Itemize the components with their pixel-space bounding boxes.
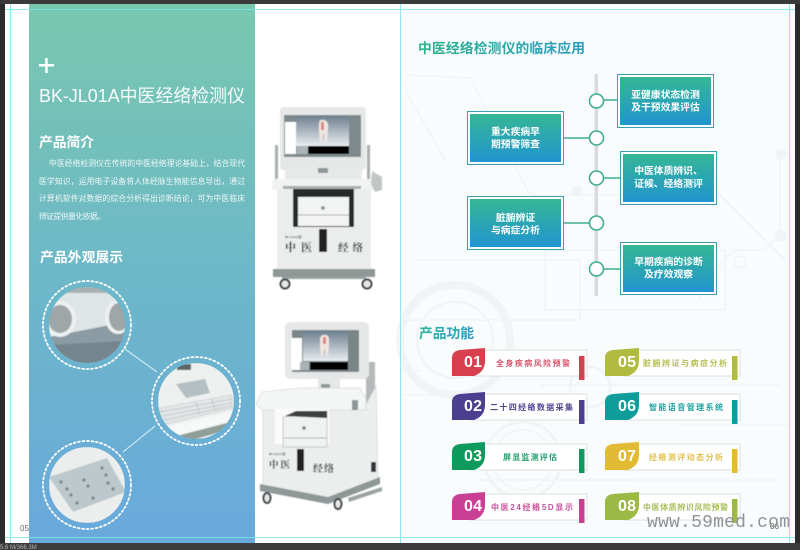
function 03 xyxy=(452,442,587,473)
application box 5: 早期疾病的诊断 xyxy=(634,255,703,268)
left gradient panel xyxy=(29,4,255,543)
application box 5 xyxy=(620,242,716,294)
heading: product intro: 产品简介 xyxy=(39,134,94,150)
application box 3 xyxy=(620,152,716,204)
timeline node 5 xyxy=(590,262,620,276)
connector lines between detail circles xyxy=(123,349,157,452)
function 04 xyxy=(452,492,587,523)
function 07 xyxy=(605,442,740,473)
function 02: 二十四经络数据采集 xyxy=(490,402,573,412)
function 08 xyxy=(605,492,740,523)
application box 4: 脏腑辨证 xyxy=(496,211,535,224)
heading: product functions: 产品功能 xyxy=(419,325,474,341)
function 01: 全身疾病风险预警 xyxy=(496,358,570,368)
text block: product intro: 计算机软件对数据的综合分析得出诊断结论，可为中医临床 xyxy=(39,193,245,203)
page: right tinted sheet xyxy=(400,4,795,543)
function 04: 中医24经络5D显示 xyxy=(491,502,573,512)
application box 5: 及疗效观察 xyxy=(644,268,693,280)
application box 4 xyxy=(468,196,564,250)
product photo: machine angled view: 经络 xyxy=(313,460,335,475)
product photo: machine front view xyxy=(272,107,382,288)
heading: clinical application: 中医经络检测仪的临床应用 xyxy=(418,40,585,56)
timeline node 1 xyxy=(590,94,617,108)
application box 3: 证候、经络测评 xyxy=(634,177,703,190)
function 01: 01 xyxy=(464,354,482,371)
product photo: machine front view: 中医 xyxy=(285,239,317,255)
function 04: 04 xyxy=(464,498,482,515)
product photo: machine angled view: BK-JL01A型 xyxy=(269,451,286,456)
text block: product intro: 医学知识，运用电子设备将人体经脉生物能信息导出，通过 xyxy=(39,176,245,186)
function 06: 06 xyxy=(618,398,636,415)
function 07: 经络测评动态分析 xyxy=(649,452,723,462)
application box 1 xyxy=(618,74,714,128)
function 05 xyxy=(605,348,740,380)
product photo: machine front view: 经络 xyxy=(338,240,367,255)
detail circle: keyboard xyxy=(152,357,240,445)
heading: product appearance: 产品外观展示 xyxy=(40,249,123,265)
text block: product intro: 辨证提供量化依据。 xyxy=(39,211,105,221)
function 06 xyxy=(605,392,740,424)
function 07: 07 xyxy=(618,448,636,465)
application box 2: 期预警筛查 xyxy=(491,138,540,150)
page number right: 06 xyxy=(770,522,779,531)
timeline node 2 xyxy=(564,131,604,145)
function 02: 02 xyxy=(464,398,482,415)
application box 1: 亚健康状态检测 xyxy=(631,88,700,101)
timeline: vertical bar xyxy=(594,74,598,296)
timeline node 3 xyxy=(590,171,620,185)
application box 2: 重大疾病早 xyxy=(491,125,540,138)
function 01 xyxy=(452,348,587,380)
detail circle: speakers xyxy=(43,281,131,369)
faint circuit background pattern xyxy=(400,75,790,498)
page: left white sheet xyxy=(5,4,400,543)
application box 1: 及干预效果评估 xyxy=(631,100,700,114)
function 05: 脏腑辨证与病症分析 xyxy=(643,358,727,368)
page number left: 05 xyxy=(20,524,29,533)
function 08: 08 xyxy=(618,498,636,515)
product photo: machine front view: BK-JL01A型 xyxy=(285,234,302,239)
function 02 xyxy=(452,392,587,424)
title: BK-JL01A中医经络检测仪 xyxy=(39,86,245,106)
product photo: machine angled view: 中医 xyxy=(269,457,292,471)
text block: product intro: 中医经络检测仪在传统的中医经络理论基础上，结合现代 xyxy=(49,158,245,168)
application box 2 xyxy=(468,112,564,164)
timeline node 4 xyxy=(564,216,604,230)
function 03: 屏显监测评估 xyxy=(503,452,557,462)
function 03: 03 xyxy=(464,448,482,465)
icon: plus sign xyxy=(39,58,54,73)
application box 3: 中医体质辨识、 xyxy=(634,164,703,177)
detail circle: control panel xyxy=(43,441,131,529)
function 08: 中医体质辨识风险预警 xyxy=(643,502,728,512)
function 06: 智能语音管理系统 xyxy=(649,402,723,412)
function 05: 05 xyxy=(618,354,636,371)
application box 4: 与病症分析 xyxy=(491,224,540,236)
text block: product intro xyxy=(39,158,245,221)
watermark: www.59med.com xyxy=(647,513,790,533)
product photo: machine angled view xyxy=(256,322,382,509)
